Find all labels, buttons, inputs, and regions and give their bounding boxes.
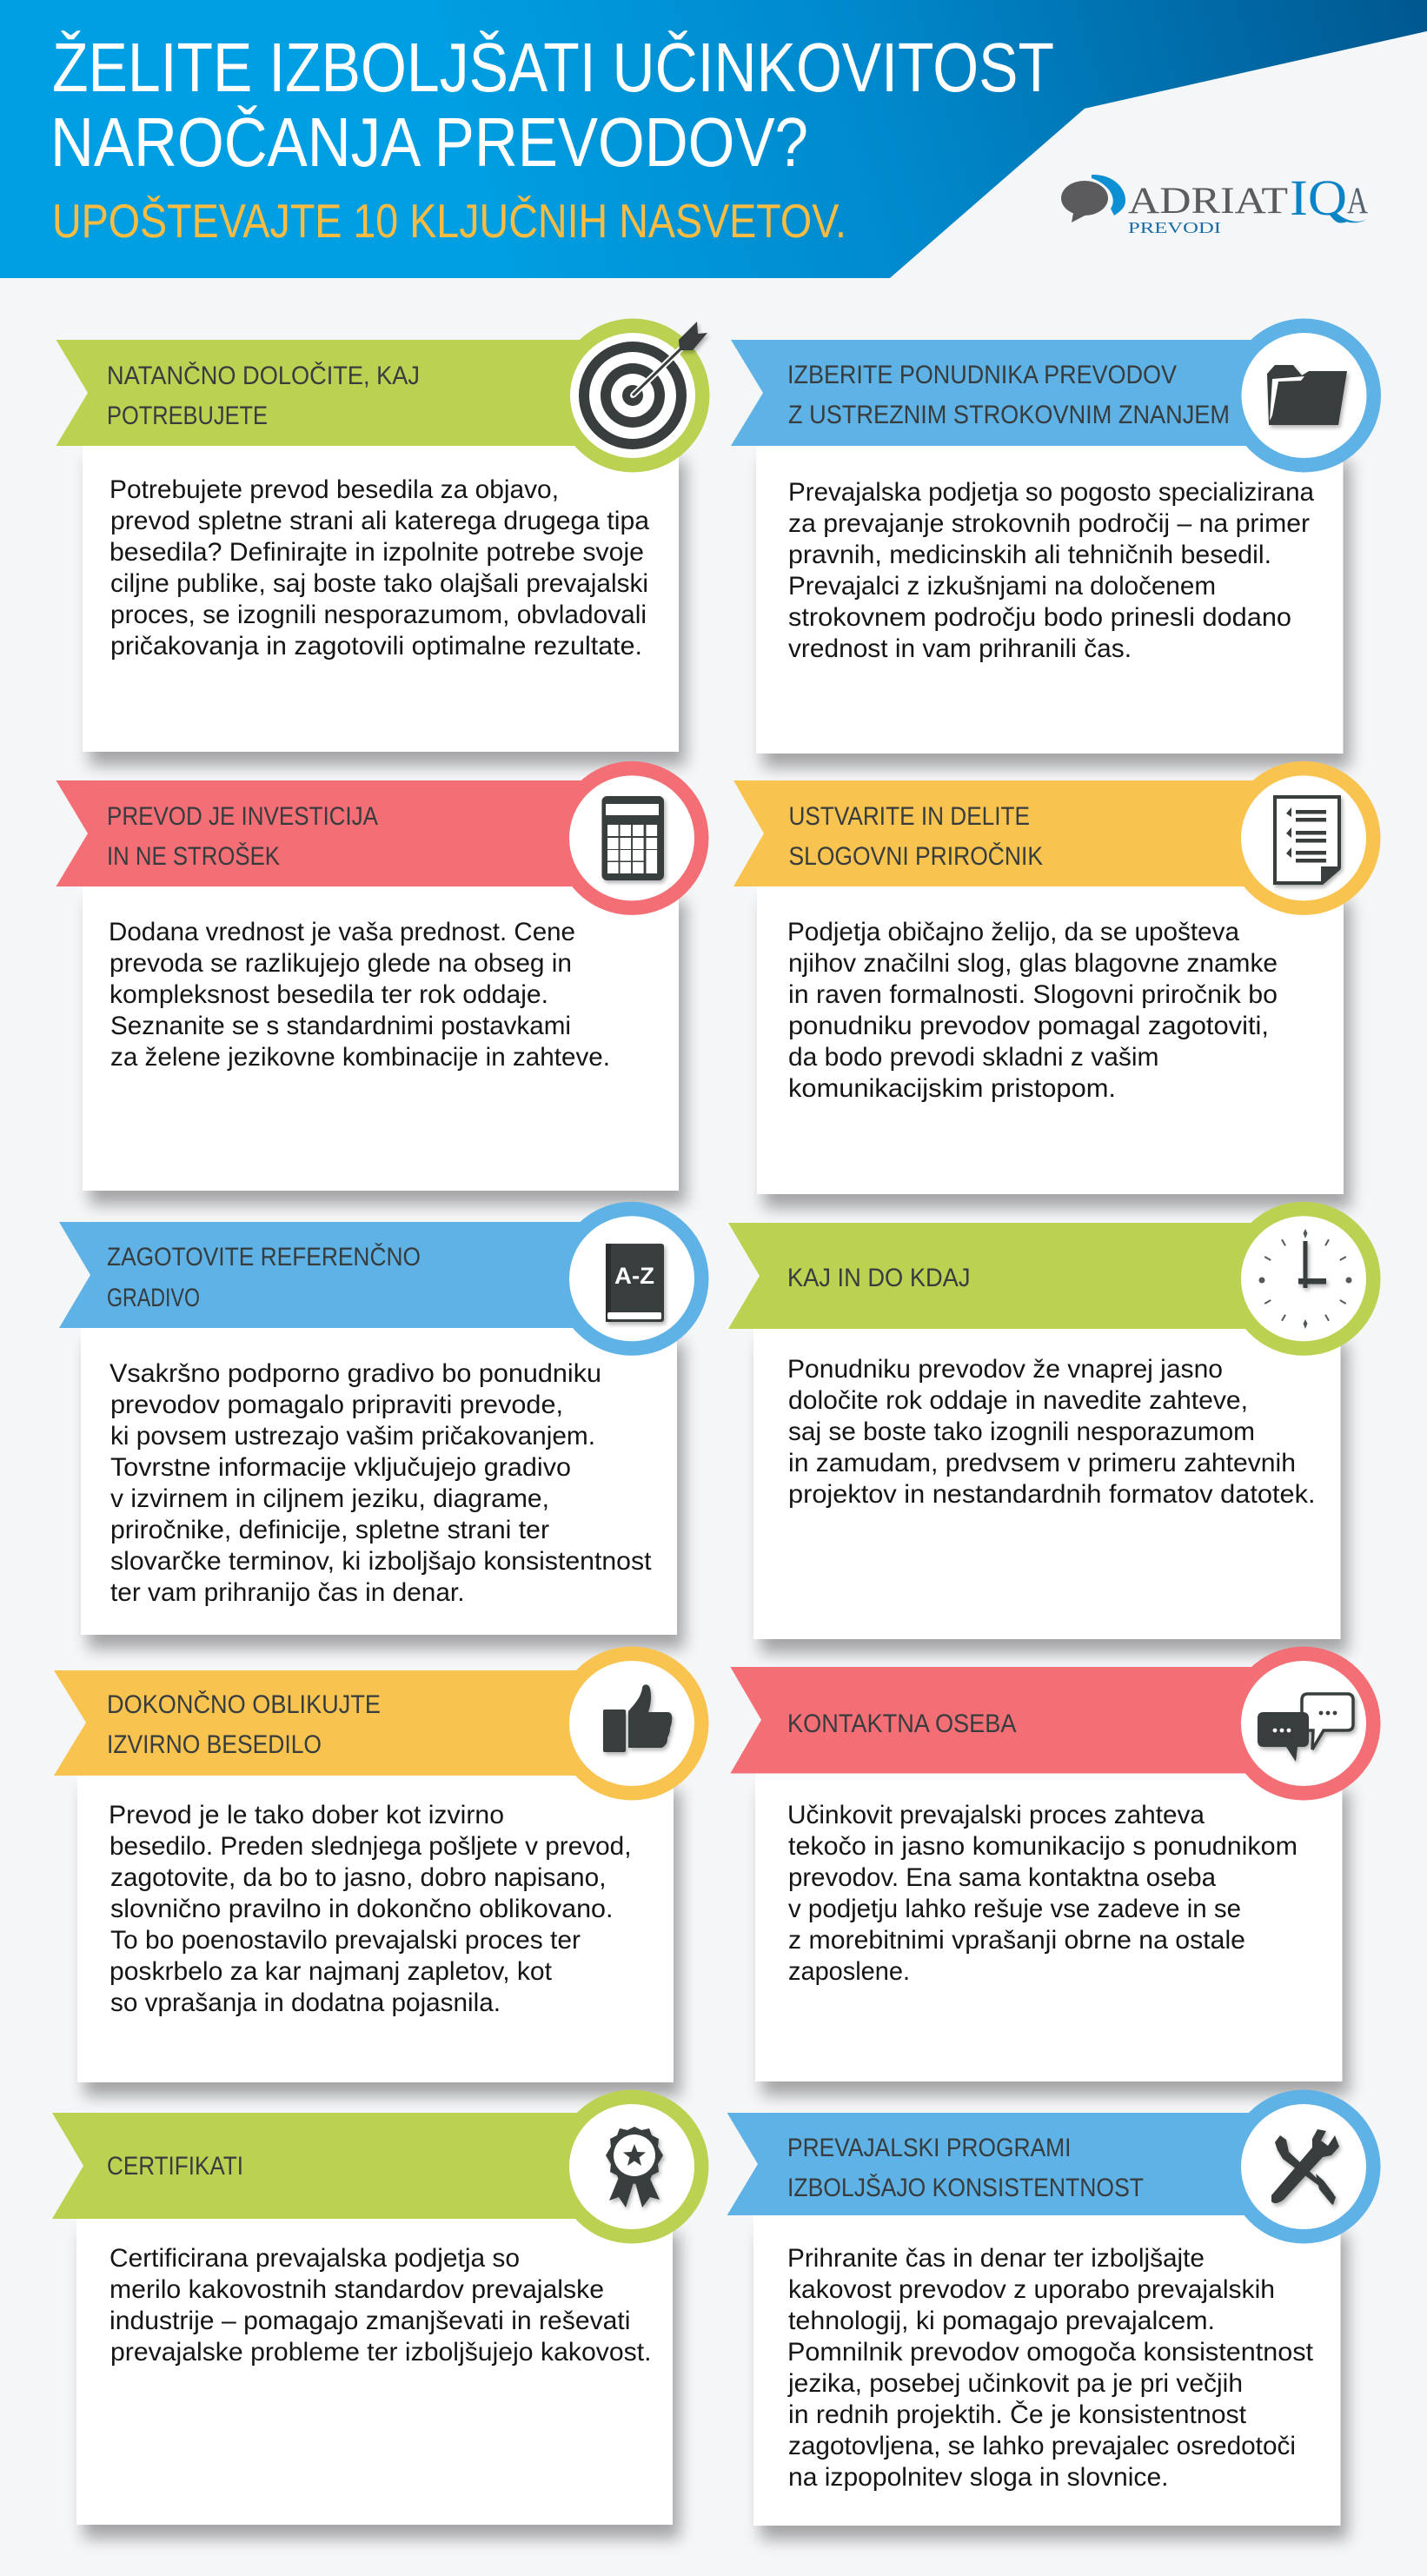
text block: z morebitnimi vprašanji obrne na ostale — [788, 1926, 1245, 1955]
text block: Potrebujete prevod besedila za objavo, — [110, 475, 559, 504]
text block — [787, 1355, 1316, 1509]
text block — [788, 478, 1314, 663]
text block: Prevajalci z izkušnjami na določenem — [788, 572, 1216, 601]
text block: projektov in nestandardnih formatov datotek. — [788, 1480, 1316, 1509]
text block — [787, 1801, 1298, 1986]
text block — [787, 2244, 1314, 2492]
heading: Z USTREZNIM STROKOVNIM ZNANJEM — [788, 401, 1230, 429]
text block: Podjetja običajno želijo, da se upošteva — [787, 918, 1239, 946]
heading — [789, 802, 1043, 871]
title: NAROČANJA PREVODOV? — [50, 103, 808, 181]
heading — [107, 1690, 381, 1759]
icon: wrench and screwdriver — [1271, 2129, 1339, 2205]
icon: A-Z book — [606, 1244, 664, 1322]
panel: natančno določite — [56, 318, 709, 766]
heading: IZVIRNO BESEDILO — [107, 1730, 322, 1759]
text block: komunikacijskim pristopom. — [788, 1074, 1116, 1103]
text block: za želene jezikovne kombinacije in zahteve. — [110, 1043, 610, 1072]
panel: slogovni priročnik — [733, 761, 1380, 1208]
panel: certifikati — [52, 2089, 709, 2539]
text block — [787, 918, 1278, 1103]
text block: v podjetju lahko rešuje vse zadeve in se — [788, 1895, 1241, 1923]
text block: pričakovanja in zagotovili optimalne rezultate. — [110, 632, 642, 661]
heading: DOKONČNO OBLIKUJTE — [107, 1690, 381, 1719]
text block: kakovost prevodov z uporabo prevajalskih — [788, 2275, 1275, 2304]
icon: clock — [1258, 1229, 1352, 1329]
text block: pravnih, medicinskih ali tehničnih besedil. — [788, 541, 1271, 569]
text block: zagotovite, da bo to jasno, dobro napisano, — [110, 1863, 607, 1892]
icon: target with arrow — [579, 322, 707, 449]
text block: in zamudam, predvsem v primeru zahtevnih — [788, 1449, 1296, 1477]
text block: tehnologij, ki pomagajo prevajalcem. — [788, 2307, 1215, 2335]
text block: Certificirana prevajalska podjetja so — [110, 2244, 520, 2273]
icon: award rosette — [606, 2127, 663, 2208]
text block — [109, 1801, 631, 2017]
icon: folder — [1267, 365, 1347, 425]
heading: IN NE STROŠEK — [107, 841, 280, 871]
text block: strokovnem področju bodo prinesli dodano — [788, 603, 1291, 632]
text block: besedila? Definirajte in izpolnite potrebe svoje — [110, 538, 644, 567]
text block: Seznanite se s standardnimi postavkami — [110, 1012, 571, 1040]
text block: Pomnilnik prevodov omogoča konsistentnost — [787, 2338, 1314, 2367]
panel: kaj in do kdaj — [728, 1202, 1380, 1653]
text block: ter vam prihranijo čas in denar. — [110, 1578, 464, 1607]
text block: in raven formalnosti. Slogovni priročnik bo — [788, 980, 1278, 1009]
logo: Adriatiqa Prevodi — [1061, 169, 1368, 236]
text block — [110, 1359, 652, 1607]
heading: NATANČNO DOLOČITE, KAJ — [107, 361, 420, 390]
logo: Adriatiqa Prevodi: PREVODI — [1128, 219, 1221, 236]
text block: prevod spletne strani ali katerega drugega tipa — [110, 507, 649, 535]
text block: besedilo. Preden slednjega pošljete v prevod, — [110, 1832, 631, 1861]
text block: Učinkovit prevajalski proces zahteva — [787, 1801, 1205, 1829]
heading: POTREBUJETE — [107, 402, 268, 430]
text block: merilo kakovostnih standardov prevajalske — [110, 2275, 604, 2304]
header banner — [0, 0, 1427, 278]
icon: chat bubbles — [1258, 1694, 1353, 1762]
subtitle: UPOŠTEVAJTE 10 KLJUČNIH NASVETOV. — [52, 194, 846, 248]
heading — [107, 1242, 421, 1312]
heading: PREVOD JE INVESTICIJA — [107, 802, 378, 831]
text block: tekočo in jasno komunikacijo s ponudnikom — [788, 1832, 1298, 1861]
text block: na izpopolnitev sloga in slovnice. — [788, 2463, 1168, 2492]
text block: Dodana vrednost je vaša prednost. Cene — [109, 918, 575, 946]
text block — [110, 475, 649, 661]
text block: določite rok oddaje in navedite zahteve, — [788, 1386, 1248, 1415]
text block: kompleksnost besedila ter rok oddaje. — [110, 980, 548, 1009]
text block: industrije – pomagajo zmanjševati in reševati — [110, 2307, 631, 2335]
panel: dokončno oblikujte — [54, 1646, 709, 2096]
text block: ponudniku prevodov pomagal zagotoviti, — [788, 1012, 1269, 1040]
heading: KAJ IN DO KDAJ — [787, 1264, 970, 1292]
text block: da bodo prevodi skladni z vašim — [788, 1043, 1159, 1072]
text block: slovarčke terminov, ki izboljšajo konsistentnost — [110, 1547, 652, 1576]
logo: Adriatiqa Prevodi: IQ — [1290, 169, 1347, 226]
heading — [787, 361, 1230, 429]
text block: proces, se izognili nesporazumom, obvladovali — [110, 601, 647, 629]
heading: SLOGOVNI PRIROČNIK — [789, 841, 1043, 871]
icon: checklist document — [1273, 795, 1341, 885]
icon: calculator — [601, 796, 664, 880]
text block: prevajalske probleme ter izboljšujejo kakovost. — [110, 2338, 652, 2367]
text block: so vprašanja in dodatna pojasnila. — [110, 1988, 501, 2017]
text block: To bo poenostavilo prevajalski proces ter — [110, 1926, 581, 1955]
text block: prevoda se razlikujejo glede na obseg in — [110, 949, 572, 978]
heading: GRADIVO — [107, 1284, 200, 1312]
text block: Ponudniku prevodov že vnaprej jasno — [787, 1355, 1223, 1384]
icon: thumbs up — [603, 1684, 672, 1752]
heading: CERTIFIKATI — [107, 2152, 243, 2181]
text block: ki povsem ustrezajo vašim pričakovanjem. — [110, 1422, 595, 1451]
text block: Vsakršno podporno gradivo bo ponudniku — [110, 1359, 601, 1388]
text block: prevodov. Ena sama kontaktna oseba — [788, 1863, 1216, 1892]
icon: A-Z book: A-Z — [614, 1263, 654, 1289]
heading: IZBOLJŠAJO KONSISTENTNOST — [787, 2173, 1144, 2202]
panel: prevajalski programi — [727, 2089, 1380, 2539]
text block: Prihranite čas in denar ter izboljšajte — [787, 2244, 1205, 2273]
heading: KONTAKTNA OSEBA — [787, 1710, 1017, 1738]
heading: USTVARITE IN DELITE — [789, 802, 1030, 831]
title: ŽELITE IZBOLJŠATI UČINKOVITOST — [52, 29, 1054, 106]
text block: jezika, posebej učinkovit pa je pri večjih — [787, 2369, 1243, 2398]
text block: zagotovljena, se lahko prevajalec osredotoči — [788, 2432, 1296, 2460]
text block: Prevajalska podjetja so pogosto specializirana — [788, 478, 1314, 507]
text block: prevodov pomagalo pripraviti prevode, — [110, 1391, 563, 1419]
text block — [109, 918, 610, 1072]
heading — [787, 2134, 1144, 2202]
text block: ciljne publike, saj boste tako olajšali prevajalski — [110, 569, 648, 598]
text block: slovnično pravilno in dokončno oblikovano. — [110, 1895, 614, 1923]
panel: kontaktna oseba — [730, 1646, 1380, 2095]
text block: Tovrstne informacije vključujejo gradivo — [110, 1453, 571, 1482]
panel: referenčno gradivo — [59, 1202, 709, 1649]
text block: v izvirnem in ciljnem jeziku, diagrame, — [110, 1484, 549, 1513]
title — [50, 29, 1054, 181]
text block: zaposlene. — [788, 1957, 910, 1986]
text block — [110, 2244, 652, 2367]
text block: Prevod je le tako dober kot izvirno — [109, 1801, 504, 1829]
text block: poskrbelo za kar najmanj zapletov, kot — [110, 1957, 553, 1986]
text block: in rednih projektih. Če je konsistentnost — [788, 2400, 1247, 2429]
logo: Adriatiqa Prevodi: ADRIAT — [1128, 181, 1288, 222]
text block: za prevajanje strokovnih področij – na primer — [788, 509, 1310, 538]
heading: PREVAJALSKI PROGRAMI — [787, 2134, 1071, 2162]
panel: izberite ponudnika — [731, 318, 1381, 767]
heading: IZBERITE PONUDNIKA PREVODOV — [787, 361, 1177, 389]
logo: Adriatiqa Prevodi: A — [1347, 181, 1368, 222]
panel: prevod je investicija — [56, 761, 709, 1205]
heading — [107, 802, 378, 871]
text block: vrednost in vam prihranili čas. — [788, 634, 1132, 663]
heading: ZAGOTOVITE REFERENČNO — [107, 1242, 421, 1271]
heading — [107, 361, 420, 430]
text block: njihov značilni slog, glas blagovne znamke — [788, 949, 1278, 978]
text block: priročnike, definicije, spletne strani ter — [110, 1516, 549, 1544]
text block: saj se boste tako izognili nesporazumom — [788, 1417, 1255, 1446]
